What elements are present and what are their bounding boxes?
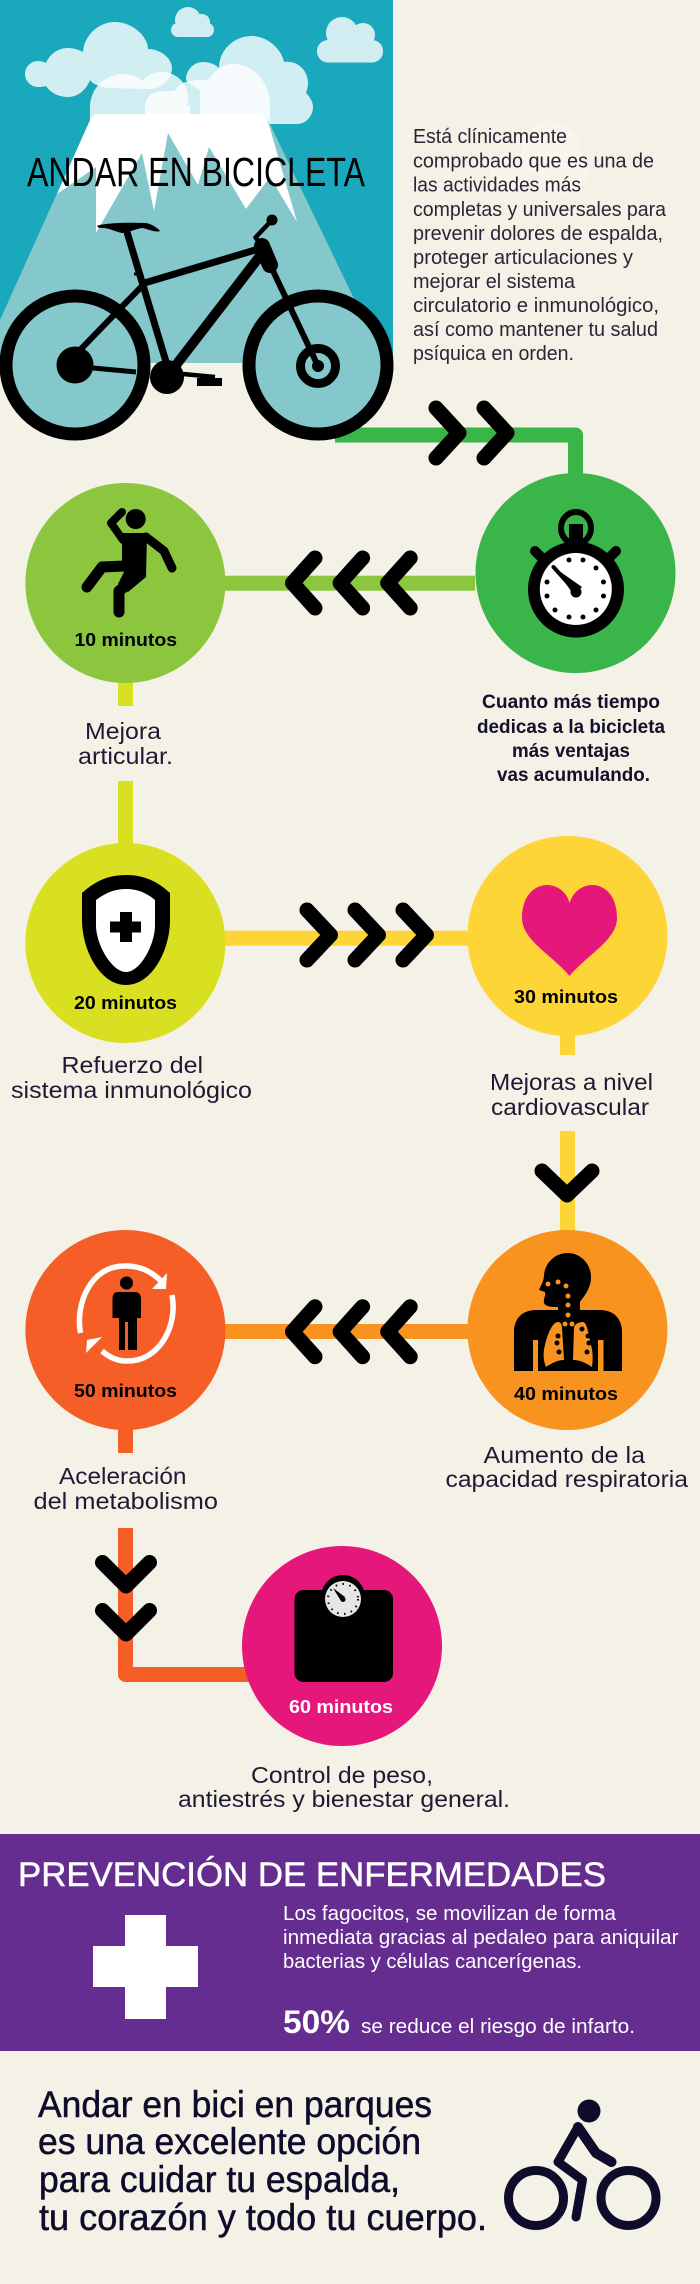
- connector: step 20 to step 30: [225, 931, 470, 946]
- hubs, crank and pedal: [56, 346, 222, 394]
- intro paragraph: prevenir dolores de espalda,: [413, 223, 663, 245]
- time label: 30 minutos: [514, 986, 618, 1007]
- benefit text: [178, 1762, 510, 1812]
- panel: 40 minutos: [446, 1230, 689, 1492]
- icon: stopwatch: [528, 512, 624, 638]
- intro paragraph: Está clínicamente: [413, 126, 567, 148]
- circle: [25, 843, 225, 1043]
- benefit text: articular.: [78, 743, 173, 769]
- benefit text: [11, 1052, 252, 1103]
- intro paragraph: comprobado que es una de: [413, 150, 654, 172]
- saddle: [97, 223, 160, 233]
- closing statement: [38, 2084, 487, 2238]
- icon: cyclist: [508, 2100, 656, 2226]
- benefit text: cardiovascular: [491, 1094, 649, 1120]
- faint cloud behind intro text: [490, 121, 589, 194]
- panel: prevención de enfermedades: [0, 1834, 700, 2051]
- connector: step 40 to step 50: [225, 1324, 470, 1339]
- panel: 20 minutos: [11, 843, 252, 1103]
- statistic: [283, 2004, 635, 2040]
- cloud: front white: [145, 64, 270, 125]
- benefit text: sistema inmunológico: [11, 1077, 252, 1103]
- icon: weighing scale: [294, 1575, 393, 1682]
- benefit text: Mejora: [85, 718, 162, 744]
- front hub ring: [300, 348, 336, 384]
- arrow: light green triple chevron: [292, 558, 410, 608]
- intro paragraph: mejorar el sistema: [413, 271, 576, 293]
- handlebar grip: [266, 214, 278, 226]
- circle: [467, 1230, 667, 1430]
- arrow: orange triple chevron: [292, 1307, 410, 1357]
- closing statement: tu corazón y todo tu cuerpo.: [39, 2197, 487, 2238]
- benefit text: Refuerzo del: [62, 1052, 203, 1078]
- benefit text: Mejoras a nivel: [490, 1069, 653, 1095]
- closing statement: Andar en bici en parques: [38, 2084, 432, 2125]
- benefit text: [446, 1442, 689, 1492]
- heading: PREVENCIÓN DE ENFERMEDADES: [18, 1856, 606, 1894]
- cloud: small top: [171, 7, 214, 37]
- icon: person with pain: [87, 509, 172, 612]
- benefit text: [34, 1463, 218, 1514]
- time label: 20 minutos: [74, 992, 177, 1013]
- arrow: green double chevron: [436, 408, 507, 458]
- hero panel: sky, clouds and mountain: [0, 0, 393, 363]
- circle: [25, 1230, 225, 1430]
- frame: [80, 220, 318, 377]
- time label: 40 minutos: [514, 1383, 618, 1404]
- arrow: yellow down chevron: [542, 1171, 592, 1195]
- benefit text: [490, 1069, 653, 1120]
- intro paragraph: psíquica en orden.: [413, 343, 574, 365]
- benefit text: Aceleración: [59, 1463, 186, 1489]
- intro paragraph: así como mantener tu salud: [413, 319, 658, 341]
- intro paragraph: proteger articulaciones y: [413, 247, 633, 269]
- time label: 10 minutos: [74, 629, 177, 650]
- intro caption: vas acumulando.: [497, 764, 650, 786]
- closing statement: para cuidar tu espalda,: [39, 2159, 400, 2200]
- intro caption: dedicas a la bicicleta: [477, 716, 665, 738]
- mountain: [0, 114, 385, 363]
- icon: heart: [522, 885, 617, 976]
- description: Los fagocitos, se movilizan de forma: [283, 1903, 617, 1925]
- time label: 60 minutos: [289, 1696, 393, 1717]
- intro paragraph: [413, 126, 667, 365]
- arrow: orange double down chevron: [102, 1562, 150, 1634]
- cloud: large right: [186, 36, 313, 124]
- circle: [468, 836, 668, 1036]
- connector: step 10 to step 20: [118, 680, 133, 851]
- connector: step 10 to stopwatch: [225, 576, 475, 591]
- panel: stopwatch intro circle: [476, 473, 676, 786]
- closing statement: es una excelente opción: [38, 2121, 421, 2162]
- mountain snow: [57, 114, 297, 233]
- icon: person with rotation arrows: [79, 1266, 173, 1361]
- benefit text: del metabolismo: [34, 1488, 218, 1514]
- panel: 50 minutos: [25, 1230, 225, 1514]
- purple background: [0, 1834, 700, 2051]
- intro paragraph: las actividades más: [413, 174, 581, 196]
- cloud: lower centre: [90, 72, 190, 140]
- intro caption: [477, 691, 665, 786]
- icon: white cross: [93, 1915, 198, 2019]
- description: inmediata gracias al pedaleo para aniquilar: [283, 1927, 679, 1949]
- circle: [242, 1546, 442, 1746]
- icon: shield with cross: [82, 875, 170, 985]
- panel: 60 minutos: [178, 1546, 510, 1812]
- circle: [476, 473, 676, 673]
- intro caption: más ventajas: [512, 740, 630, 762]
- panel: 10 minutos: [25, 483, 225, 769]
- icon: bicycle: [6, 214, 387, 434]
- description: bacterias y células cancerígenas.: [283, 1951, 582, 1973]
- cloud: top right: [317, 17, 383, 62]
- benefit text: [78, 718, 173, 769]
- front and rear wheels: [6, 296, 387, 434]
- icon: respiratory system: [514, 1253, 622, 1371]
- title: ANDAR EN BICICLETA: [27, 149, 366, 195]
- description: [283, 1903, 679, 1973]
- connector: step 50 to step 60: [118, 1425, 260, 1674]
- arrow: yellow triple chevron: [307, 910, 426, 960]
- connector: step 30 to step 40: [560, 1030, 575, 1236]
- benefit text: Control de peso,: [251, 1762, 433, 1788]
- intro paragraph: circulatorio e inmunológico,: [413, 295, 659, 317]
- circle: [25, 483, 225, 683]
- intro paragraph: completas y universales para: [413, 199, 667, 221]
- sky background: [0, 0, 393, 363]
- connector: bicycle to stopwatch: [335, 435, 576, 485]
- statistic: se reduce el riesgo de infarto.: [361, 2016, 635, 2038]
- intro caption: Cuanto más tiempo: [482, 691, 660, 713]
- benefit text: Aumento de la: [484, 1442, 646, 1468]
- benefit text: antiestrés y bienestar general.: [178, 1786, 510, 1812]
- statistic: 50%: [283, 2004, 350, 2040]
- panel: 30 minutos: [468, 836, 668, 1120]
- cloud: large left: [25, 22, 172, 97]
- time label: 50 minutos: [74, 1380, 177, 1401]
- benefit text: capacidad respiratoria: [446, 1466, 689, 1492]
